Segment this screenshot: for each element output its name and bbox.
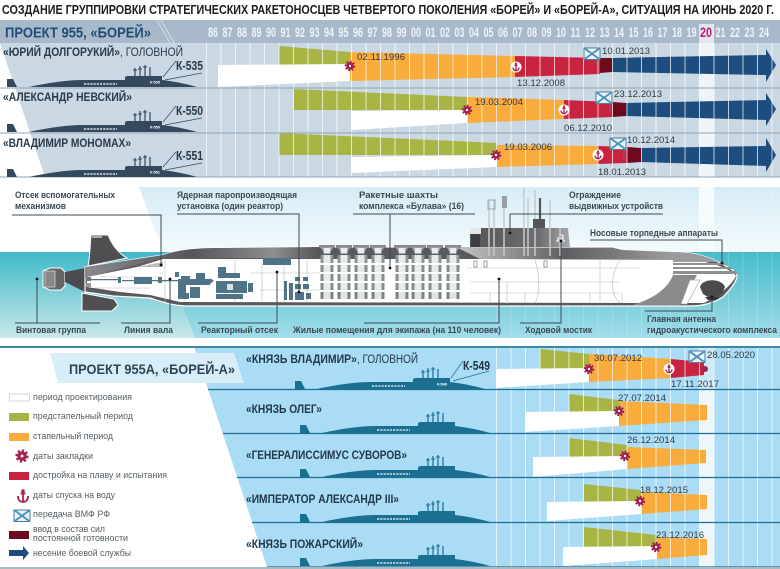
timeline row: Knyaz Pozharsky: [563, 527, 707, 566]
year axis labels: 03: [454, 25, 465, 40]
submarine silhouettes: [295, 367, 490, 566]
event dates: 18.01.2013: [598, 167, 646, 178]
deck: [458, 248, 673, 260]
year axis labels: 15: [628, 25, 639, 40]
row dividers: [208, 390, 780, 567]
legend: readiness: [9, 524, 128, 543]
machinery: [90, 258, 311, 300]
year axis labels: 90: [266, 25, 276, 40]
callout labels: Жилые помещения для экипажа (на 110 человек): [292, 325, 501, 335]
callout dots: [36, 232, 723, 298]
legend: combat duty: [9, 546, 131, 560]
year axis labels: 04: [469, 25, 479, 40]
event dates: 27.07.2014: [618, 393, 666, 404]
year grid: [206, 43, 780, 177]
year axis labels: 13: [600, 25, 610, 40]
callout labels: Отсек вспомогательных: [15, 190, 115, 200]
heading: project 955A: [50, 353, 244, 383]
callout labels: выдвижных устройств: [569, 201, 663, 211]
legend: combat duty: несение боевой службы: [33, 548, 131, 558]
year axis labels: 23: [744, 25, 755, 40]
legend: transfer to navy: передача ВМФ РФ: [33, 509, 110, 519]
year axis labels: 11: [570, 25, 581, 40]
timeline row: Imperator Alexander III: [547, 484, 707, 521]
sub names: «ИМПЕРАТОР АЛЕКСАНДР III»: [246, 494, 399, 506]
timeline row: Vladimir Monomakh: [279, 133, 776, 173]
sub names: «ВЛАДИМИР МОНОМАХ»: [3, 136, 131, 150]
timeline row: Alexander Nevsky: [294, 89, 776, 130]
sub names: , ГОЛОВНОЙ: [357, 353, 418, 366]
year axis labels: 10: [556, 25, 566, 40]
panel: project 955 Borei: [0, 20, 780, 178]
interior: [87, 259, 736, 303]
event dates: 13.12.2008: [517, 78, 565, 89]
year axis labels: 99: [396, 25, 406, 40]
year grid: [496, 348, 780, 567]
year axis labels: 98: [382, 25, 392, 40]
upper fin: [88, 235, 127, 266]
year axis labels: 18: [672, 25, 682, 40]
hull number K-549: [451, 358, 490, 381]
callout lines: [12, 214, 722, 323]
event markers: [585, 351, 705, 551]
year axis labels: [208, 24, 769, 43]
bottom rule: [0, 567, 780, 569]
tail cone: [65, 268, 85, 292]
aft divider: [137, 262, 163, 267]
event dates: 30.07.2012: [594, 353, 642, 364]
masts: [489, 187, 560, 256]
sub names: «ЮРИЙ ДОЛГОРУКИЙ»: [3, 44, 120, 59]
year axis labels: 93: [310, 25, 320, 40]
sub names: «КНЯЗЬ ПОЖАРСКИЙ»: [246, 538, 363, 551]
heading: project 955: ПРОЕКТ 955, «БОРЕЙ»: [5, 24, 151, 42]
year axis labels: 87: [222, 25, 232, 40]
event dates: 02.11.1996: [357, 52, 405, 63]
year axis labels: 86: [208, 25, 218, 40]
year axis labels: 96: [353, 25, 363, 40]
sea darker center: [163, 252, 780, 338]
callout labels: Винтовая группа: [16, 325, 87, 335]
top rule: [0, 346, 780, 348]
year axis labels: 08: [527, 25, 537, 40]
event markers: [346, 48, 626, 160]
legend: readiness: ввод в состав сил: [33, 524, 105, 534]
lower fin: [82, 293, 118, 311]
year axis labels: 92: [295, 25, 305, 40]
hull number K-549: К-549: [463, 358, 490, 373]
legend: keel laying: даты закладки: [33, 451, 93, 461]
sail: [470, 187, 570, 256]
sub names: «ГЕНЕРАЛИССИМУС СУВОРОВ»: [246, 450, 407, 462]
header band: [0, 20, 780, 43]
submarine silhouette: K-551: К-551: [150, 170, 161, 174]
panel: project 955A Borei-A: [0, 346, 780, 569]
sub names: «КНЯЗЬ ОЛЕГ»: [246, 404, 322, 416]
submarine silhouette: K-551: [7, 155, 197, 177]
sub names: [3, 44, 183, 150]
sub names: [246, 353, 418, 551]
deck hatches: [474, 261, 547, 267]
year axis labels: 19: [686, 25, 696, 40]
submarine silhouette: K-535: [7, 65, 197, 87]
year axis labels: 16: [643, 25, 653, 40]
year 2020 column: [699, 389, 714, 567]
event dates: 28.05.2020: [707, 350, 755, 361]
missile tubes: [319, 245, 461, 299]
legend: transfer to navy: [14, 509, 110, 522]
heading: project 955A: ПРОЕКТ 955А, «БОРЕЙ-А»: [69, 360, 235, 377]
legend: readiness: постоянной готовности: [33, 533, 128, 543]
sub names: «КНЯЗЬ ВЛАДИМИР»: [246, 354, 357, 366]
year axis labels: 14: [614, 25, 624, 40]
event dates: 10.01.2013: [602, 46, 650, 57]
year axis labels: 01: [426, 25, 436, 40]
event dates: 10.12.2014: [627, 135, 675, 146]
year axis labels: 07: [512, 25, 522, 40]
callout labels: комплекса «Булава» (16): [359, 201, 464, 211]
callout labels: Линия вала: [124, 325, 174, 335]
year axis labels: 05: [484, 25, 494, 40]
event dates: 18.12.2015: [640, 485, 688, 496]
event dates: [357, 46, 675, 178]
submarine cutaway: [43, 187, 737, 311]
callout labels: установка (один реактор): [177, 201, 283, 211]
event dates: 06.12.2010: [564, 123, 612, 134]
sea left: [0, 252, 780, 338]
grid: [496, 187, 780, 338]
callout labels: Ракетные шахты: [359, 190, 438, 200]
nose: torpedo tubes and sonar: [633, 252, 737, 305]
sub names: «АЛЕКСАНДР НЕВСКИЙ»: [3, 89, 132, 104]
event dates: 26.12.2014: [627, 435, 675, 446]
year axis labels: 89: [252, 25, 262, 40]
timeline row: Generalissimus Suvorov: [533, 438, 706, 477]
sub names: , ГОЛОВНОЙ: [120, 44, 183, 59]
year axis labels: 97: [368, 25, 378, 40]
year axis labels: 06: [498, 25, 508, 40]
legend: pre-slip period: предстапельный период: [33, 411, 134, 421]
panel: submarine cross-section: [0, 187, 780, 338]
2020 column: [699, 187, 714, 252]
sky background: [139, 187, 780, 252]
callout labels: Ядерная паропроизводящая: [177, 190, 297, 200]
callout labels: Главная антенна: [647, 314, 717, 324]
callout labels: механизмов: [15, 201, 66, 211]
propeller group: [43, 268, 65, 290]
year axis labels: 22: [730, 25, 740, 40]
year axis labels: 94: [324, 25, 334, 40]
hull numbers: К-550: [176, 103, 203, 118]
row dividers: [0, 88, 780, 177]
event dates: 19.03.2004: [475, 97, 523, 108]
legend: launch: даты спуска на воду: [33, 490, 115, 500]
compartment lines: [95, 260, 640, 304]
event dates: 23.12.2013: [614, 89, 662, 100]
year 2020 column: [699, 43, 714, 177]
hull numbers: К-551: [176, 148, 203, 163]
legend: design period: период проектирования: [33, 392, 132, 402]
year axis labels: 20: [700, 25, 712, 40]
legend: launch: [18, 489, 115, 502]
event dates: [594, 350, 755, 541]
chart background: [0, 43, 780, 177]
callout labels: Ходовой мостик: [525, 325, 592, 335]
hull outer: [85, 247, 737, 306]
legend: fitting out: достройка на плаву и испытания: [33, 470, 167, 480]
event dates: 19.03.2006: [504, 142, 552, 153]
year axis labels: 95: [338, 25, 349, 40]
hull numbers: [163, 58, 203, 170]
callout labels: [15, 190, 778, 335]
event dates: 23.12.2016: [656, 530, 704, 541]
timeline row: Knyaz Vladimir: [496, 349, 708, 388]
legend: slip period: стапельный период: [33, 431, 114, 441]
year axis labels: 00: [411, 25, 421, 40]
callout labels: Носовые торпедные аппараты: [590, 228, 718, 238]
year axis labels: 09: [542, 25, 552, 40]
callout labels: Реакторный отсек: [201, 325, 278, 335]
year axis labels: 88: [237, 25, 247, 40]
timeline row: Knyaz Oleg: [525, 394, 707, 432]
submarine silhouette: K-550: [7, 110, 197, 132]
timeline row: Yuri Dolgoruky: [218, 46, 776, 87]
year axis labels: 12: [585, 25, 595, 40]
year axis labels: 21: [716, 25, 726, 40]
legend: [9, 392, 167, 560]
submarine silhouette: K-550: К-550: [150, 124, 161, 130]
year axis labels: 24: [759, 25, 769, 40]
hull numbers: К-535: [176, 58, 203, 73]
event dates: 17.11.2017: [671, 379, 719, 390]
callout labels: Ограждение: [569, 190, 621, 200]
submarine silhouettes: К-549: [437, 382, 448, 386]
year axis labels: 17: [658, 25, 668, 40]
year axis labels: 02: [440, 25, 450, 40]
submarine silhouette: K-535: К-535: [150, 80, 161, 84]
year axis labels: 91: [280, 25, 291, 40]
blue chart background: [194, 347, 780, 567]
